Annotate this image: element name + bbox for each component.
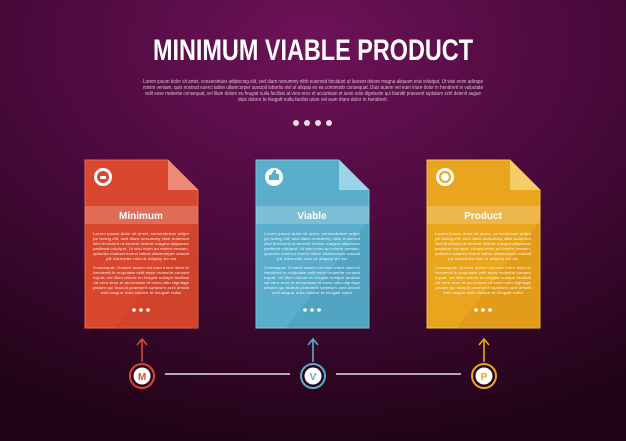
body text: equat, vel illum dolore eu feugiat nullape facilisis [93, 276, 189, 280]
intro text [143, 79, 483, 103]
body text: quiseria nostrud exerci tation ullamcorper suscid [264, 252, 360, 256]
title: MINIMUM VIABLE PRODUCT [153, 34, 473, 67]
body text: Consequat. Duiaeri autem vel eum iriure dolor in [435, 266, 531, 270]
body text: pe iscing elit, sed diam nonummy nibh euismod [435, 237, 531, 241]
body text: pissim qui blandit praesent luptatum zzril delodi [264, 286, 360, 290]
body text: ded tincidunt ut laoreet dolore magna aliquame [435, 242, 531, 246]
body text: equat, vel illum dolore eu feugiat nullape facilisis [435, 276, 531, 280]
body text: pissim qui blandit praesent luptatum zzril delodi [435, 286, 531, 290]
body text: hendrerit in vulputate velit esse molestie consed [435, 271, 531, 275]
body text: pit lobeortis nisl ut aliquip ex ea [106, 257, 176, 261]
body text: pissim qui blandit praesent luptatum zzril delodi [93, 286, 189, 290]
body text: rat vero eros et accumsan et iusto odio dignisge [435, 281, 531, 285]
body text: hendrerit in vulputate velit esse molestie consed [93, 271, 189, 275]
icon: gauge [94, 168, 112, 186]
badge: V [301, 364, 325, 388]
body text: pe iscing elit, sed diam nonummy nibh euismod [264, 237, 360, 241]
arrow: Minimum [137, 339, 147, 362]
badge: P: P [481, 372, 488, 383]
badge: V: V [310, 372, 317, 383]
body text: Lorem ipsum dolor sit amet, consectetuer adipe [93, 232, 189, 236]
badge: M: M [138, 372, 146, 383]
dots [293, 120, 332, 126]
body text: equat, vel illum dolore eu feugiat nullape facilisis [264, 276, 360, 280]
connector line [165, 373, 461, 375]
panel: Viable [256, 160, 369, 328]
body text: rat vero eros et accumsan et iusto odio dignisge [93, 281, 189, 285]
heading: Product [464, 211, 503, 222]
body text: Lorem ipsum dolor sit amet, consectetuer adipe [264, 232, 360, 236]
body text: ded tincidunt ut laoreet dolore magna aliquame [264, 242, 360, 246]
badge: M [130, 364, 154, 388]
body text: pit lobeortis nisl ut aliquip ex ea [448, 257, 518, 261]
body text: rat vero eros et accumsan et iusto odio dignisge [264, 281, 360, 285]
arrow: Product [479, 339, 489, 362]
body text [264, 232, 360, 295]
icon: thumbs up [265, 168, 283, 186]
intro text: Lorem ipsum dolor sit amet, consectetuer adipiscing elit, sed diam nonummy nibh euismod tincidunt ut laoreet dolore magna aliquam erat volutpat. Ut wisi enim adirape [143, 79, 483, 85]
body text: enit augue duis dolore te feugait nulla [443, 291, 523, 295]
body text: ded tincidunt ut laoreet dolore magna aliquame [93, 242, 189, 246]
panel: Minimum [85, 160, 198, 328]
body text: pe iscing elit, sed diam nonummy nibh euismod [93, 237, 189, 241]
body text: enit augue duis dolore te feugait nulla [101, 291, 181, 295]
icon: product [436, 168, 454, 186]
body text [435, 232, 531, 295]
body text: pedierat volutpat. Ut wisi enim ad minim veniam, [264, 247, 360, 251]
body text: enit augue duis dolore te feugait nulla [272, 291, 352, 295]
body text: pedierat volutpat. Ut wisi enim ad minim veniam, [435, 247, 531, 251]
body text: quiseria nostrud exerci tation ullamcorper suscid [93, 252, 189, 256]
body text: hendrerit in vulputate velit esse molestie consed [264, 271, 360, 275]
panel: Product [427, 160, 540, 328]
arrow: Viable [308, 339, 318, 362]
heading: Minimum [119, 211, 163, 222]
body text: pedierat volutpat. Ut wisi enim ad minim veniam, [93, 247, 189, 251]
body text: quiseria nostrud exerci tation ullamcorper suscid [435, 252, 531, 256]
body text [93, 232, 189, 295]
heading: Viable [297, 211, 327, 222]
intro text: duis dolore te feugait nulla facilisi uism vel eum iriure dolor in hendrerit. [238, 97, 388, 103]
intro text: minim veniam, quis nostrud exerci tation ullamcorper suscipit lobortis nisl ut aliquip ex ea commodo consequat. Duis autem vel eum iriure dolor in hendrerit in vulputate [143, 85, 483, 91]
body text: Consequat. Duiaeri autem vel eum iriure dolor in [93, 266, 189, 270]
body text: pit lobeortis nisl ut aliquip ex ea [277, 257, 347, 261]
badge: P [472, 364, 496, 388]
body text: Lorem ipsum dolor sit amet, consectetuer adipe [435, 232, 531, 236]
body text: Consequat. Duiaeri autem vel eum iriure dolor in [264, 266, 360, 270]
intro text: velit esse molestie consequat, vel illum dolore eu feugiat nulla facilisis at vero eros et accumsan et iusto odio dignissim qui blandit praesent luptatum zzril delenit augue [145, 91, 481, 97]
